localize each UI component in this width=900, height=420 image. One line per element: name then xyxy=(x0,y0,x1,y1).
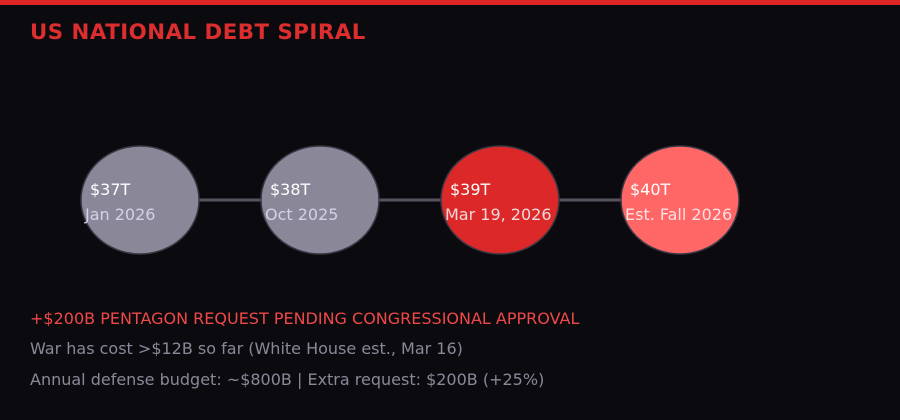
node: $37T: Jan 2026 xyxy=(84,205,155,224)
connectors xyxy=(199,198,621,202)
node: $40T: $40T xyxy=(630,180,671,199)
note: defense budget: Annual defense budget: ~$800B | Extra request: $200B (+25%) xyxy=(30,370,544,389)
node: $38T: Oct 2025 xyxy=(265,205,338,224)
title: US NATIONAL DEBT SPIRAL xyxy=(30,20,366,45)
note: war cost: War has cost >$12B so far (White House est., Mar 16) xyxy=(30,339,463,358)
node: $37T: $37T xyxy=(90,180,131,199)
node: $38T: $38T xyxy=(270,180,311,199)
node: $37T xyxy=(81,146,199,254)
node: $39T xyxy=(441,146,559,254)
node: $38T xyxy=(261,146,379,254)
node: $39T: $39T xyxy=(450,180,491,199)
top accent bar xyxy=(0,0,900,5)
node: $40T xyxy=(621,146,739,254)
node: $39T: Mar 19, 2026 xyxy=(445,205,552,224)
highlight note: +$200B PENTAGON REQUEST PENDING CONGRESSIONAL APPROVAL xyxy=(30,309,579,328)
node: $40T: Est. Fall 2026 xyxy=(625,205,732,224)
